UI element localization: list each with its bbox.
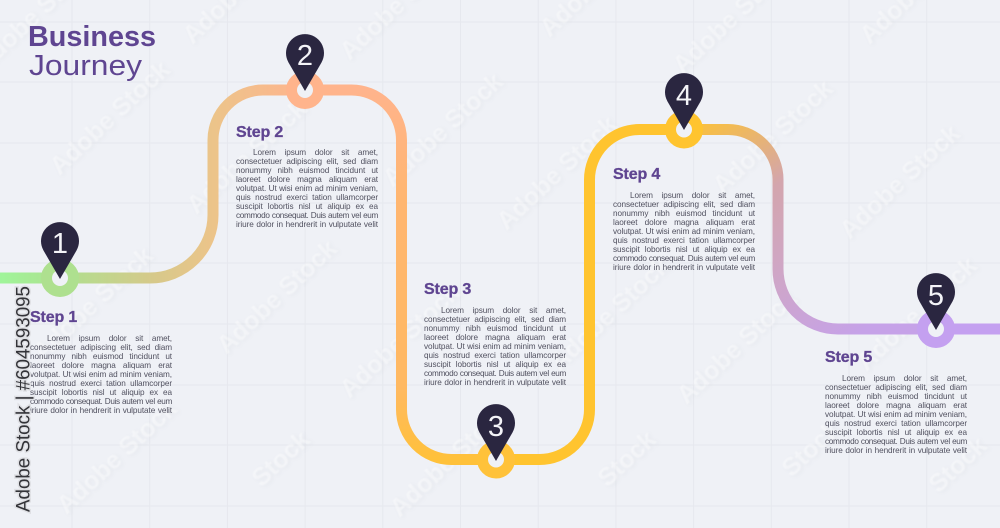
step 1 description: iriure dolor in hendrerit in vulputate velit — [30, 406, 172, 415]
pin 4: 4 — [676, 80, 692, 112]
marker ring 2 — [292, 76, 318, 104]
pin 4 — [665, 73, 703, 130]
step 4 description: consectetuer adipiscing elit, sed diam — [613, 200, 755, 209]
step 3 description: suscipit lobortis nisl ut aliquip ex ea — [424, 360, 566, 369]
step 5 description — [825, 374, 967, 455]
step 1 description — [30, 334, 172, 415]
step 5 description: volutpat. Ut wisi enim ad minim veniam, — [825, 410, 967, 419]
step 1 description: Lorem ipsum dolor sit amet, — [47, 334, 172, 343]
marker ring 1 — [46, 264, 74, 292]
stock watermarks: Stock — [777, 416, 845, 482]
stock watermarks: Stock — [247, 426, 315, 492]
stock watermarks: Adobe Stock — [835, 120, 965, 244]
step 4 description: quis nostrud exerci tation ullamcorper — [613, 236, 755, 245]
marker ring 3 — [482, 446, 510, 473]
step 5 description: quis nostrud exerci tation ullamcorper — [825, 419, 967, 428]
step 3 description: Lorem ipsum dolor sit amet, — [441, 306, 566, 315]
step 2 description: laoreet dolore magna aliquam erat — [236, 175, 378, 184]
stock watermarks: Adobe Stock — [52, 395, 182, 519]
step 5 description: suscipit lobortis nisl ut aliquip ex ea — [825, 428, 967, 437]
pin 1: 1 — [52, 228, 68, 260]
step 3 description: laoreet dolore magna aliquam erat — [424, 333, 566, 342]
step 1 description: consectetuer adipiscing elit, sed diam — [30, 343, 172, 352]
marker ring 5 — [922, 316, 950, 342]
title: Business — [28, 21, 156, 53]
title — [28, 21, 156, 82]
step 3 description: nonummy nibh euismod tincidunt ut — [424, 324, 566, 333]
route segment: step 4 to step 5 — [684, 130, 936, 329]
step 4 description — [613, 191, 755, 272]
step 3 description: commodo consequat. Duis autem vel eum — [424, 369, 566, 378]
pin 5: 5 — [928, 280, 944, 312]
pin 5 — [917, 273, 955, 330]
step 2 description: commodo consequat. Duis autem vel eum — [236, 211, 378, 220]
step 1 description: laoreet dolore magna aliquam erat — [30, 361, 172, 370]
pin 3 — [477, 404, 515, 461]
step 4 description: commodo consequat. Duis autem vel eum — [613, 254, 755, 263]
vertical stock id label: Adobe Stock | #604593095 — [12, 286, 34, 512]
step 2 description: Lorem ipsum dolor sit amet, — [253, 148, 378, 157]
route segment: step 2 to step 3 — [305, 90, 496, 460]
step 4 description: suscipit lobortis nisl ut aliquip ex ea — [613, 245, 755, 254]
step 2 description: suscipit lobortis nisl ut aliquip ex ea — [236, 202, 378, 211]
step 3 heading: Step 3 — [424, 281, 471, 298]
stock watermarks: Adobe Stock — [182, 95, 312, 219]
step 5 description: nonummy nibh euismod tincidunt ut — [825, 392, 967, 401]
stock watermarks: Adobe Stock — [45, 56, 175, 180]
step 2 description: iriure dolor in hendrerit in vulputate velit — [236, 220, 378, 229]
step 4 description: Lorem ipsum dolor sit amet, — [630, 191, 755, 200]
stock watermarks: Adobe Stock — [492, 111, 622, 235]
step 2 description — [236, 148, 378, 229]
step 4 description: nonummy nibh euismod tincidunt ut — [613, 209, 755, 218]
step 2 heading: Step 2 — [236, 124, 283, 141]
stock watermarks: Stock — [924, 432, 992, 498]
step 3 text block — [424, 281, 566, 387]
step 5 description: consectetuer adipiscing elit, sed diam — [825, 383, 967, 392]
step 1 description: quis nostrud exerci tation ullamcorper — [30, 379, 172, 388]
step 3 description: volutpat. Ut wisi enim ad minim veniam, — [424, 342, 566, 351]
title: Journey — [29, 50, 143, 82]
route segment: start to step 2 — [0, 90, 305, 278]
pin 1 — [41, 222, 79, 279]
stock watermarks: Adobe Stock — [852, 252, 982, 376]
step 4 description: iriure dolor in hendrerit in vulputate velit — [613, 263, 755, 272]
step 5 description: Lorem ipsum dolor sit amet, — [842, 374, 967, 383]
stock watermarks: Stock — [593, 426, 661, 492]
route segment: step 3 to step 4 — [496, 130, 684, 460]
stock watermarks: Adobe Stock — [545, 252, 675, 376]
stock watermarks: Adobe Stock — [212, 235, 342, 359]
stock watermarks: Adobe Stock — [335, 279, 465, 403]
step 2 description: consectetuer adipiscing elit, sed diam — [236, 157, 378, 166]
step 4 description: laoreet dolore magna aliquam erat — [613, 218, 755, 227]
step 1 text block — [30, 309, 172, 415]
step 1 description: suscipit lobortis nisl ut aliquip ex ea — [30, 388, 172, 397]
step 4 description: volutpat. Ut wisi enim ad minim veniam, — [613, 227, 755, 236]
marker ring 4 — [670, 116, 698, 143]
step 3 description: quis nostrud exerci tation ullamcorper — [424, 351, 566, 360]
step 4 heading: Step 4 — [613, 166, 660, 183]
step 5 description: iriure dolor in hendrerit in vulputate velit — [825, 446, 967, 455]
step 4 text block — [613, 166, 755, 272]
step 1 description: nonummy nibh euismod tincidunt ut — [30, 352, 172, 361]
pin 2 — [286, 34, 324, 91]
stock watermarks: Adobe Stock — [378, 68, 508, 192]
step 2 description: nonummy nibh euismod tincidunt ut — [236, 166, 378, 175]
step 1 description: volutpat. Ut wisi enim ad minim veniam, — [30, 370, 172, 379]
step 1 heading: Step 1 — [30, 309, 77, 326]
stock watermarks: Adobe Stock — [385, 398, 515, 522]
step 5 heading: Step 5 — [825, 349, 872, 366]
step 2 text block — [236, 124, 378, 229]
step 3 description: consectetuer adipiscing elit, sed diam — [424, 315, 566, 324]
step 3 description: iriure dolor in hendrerit in vulputate velit — [424, 378, 566, 387]
route segment: step 5 to edge — [936, 324, 1000, 334]
stock watermarks: Adobe Stock — [28, 242, 158, 366]
step 1 description: commodo consequat. Duis autem vel eum — [30, 397, 172, 406]
step 5 text block — [825, 349, 967, 455]
pin 2: 2 — [297, 40, 313, 72]
step 3 description — [424, 306, 566, 387]
step 2 description: quis nostrud exerci tation ullamcorper — [236, 193, 378, 202]
step 2 description: volutpat. Ut wisi enim ad minim veniam, — [236, 184, 378, 193]
stock watermarks: Adobe Stock — [708, 75, 838, 199]
step 5 description: laoreet dolore magna aliquam erat — [825, 401, 967, 410]
stock watermarks: Adobe Stock — [672, 285, 802, 409]
pin 3: 3 — [488, 411, 504, 443]
step 5 description: commodo consequat. Duis autem vel eum — [825, 437, 967, 446]
